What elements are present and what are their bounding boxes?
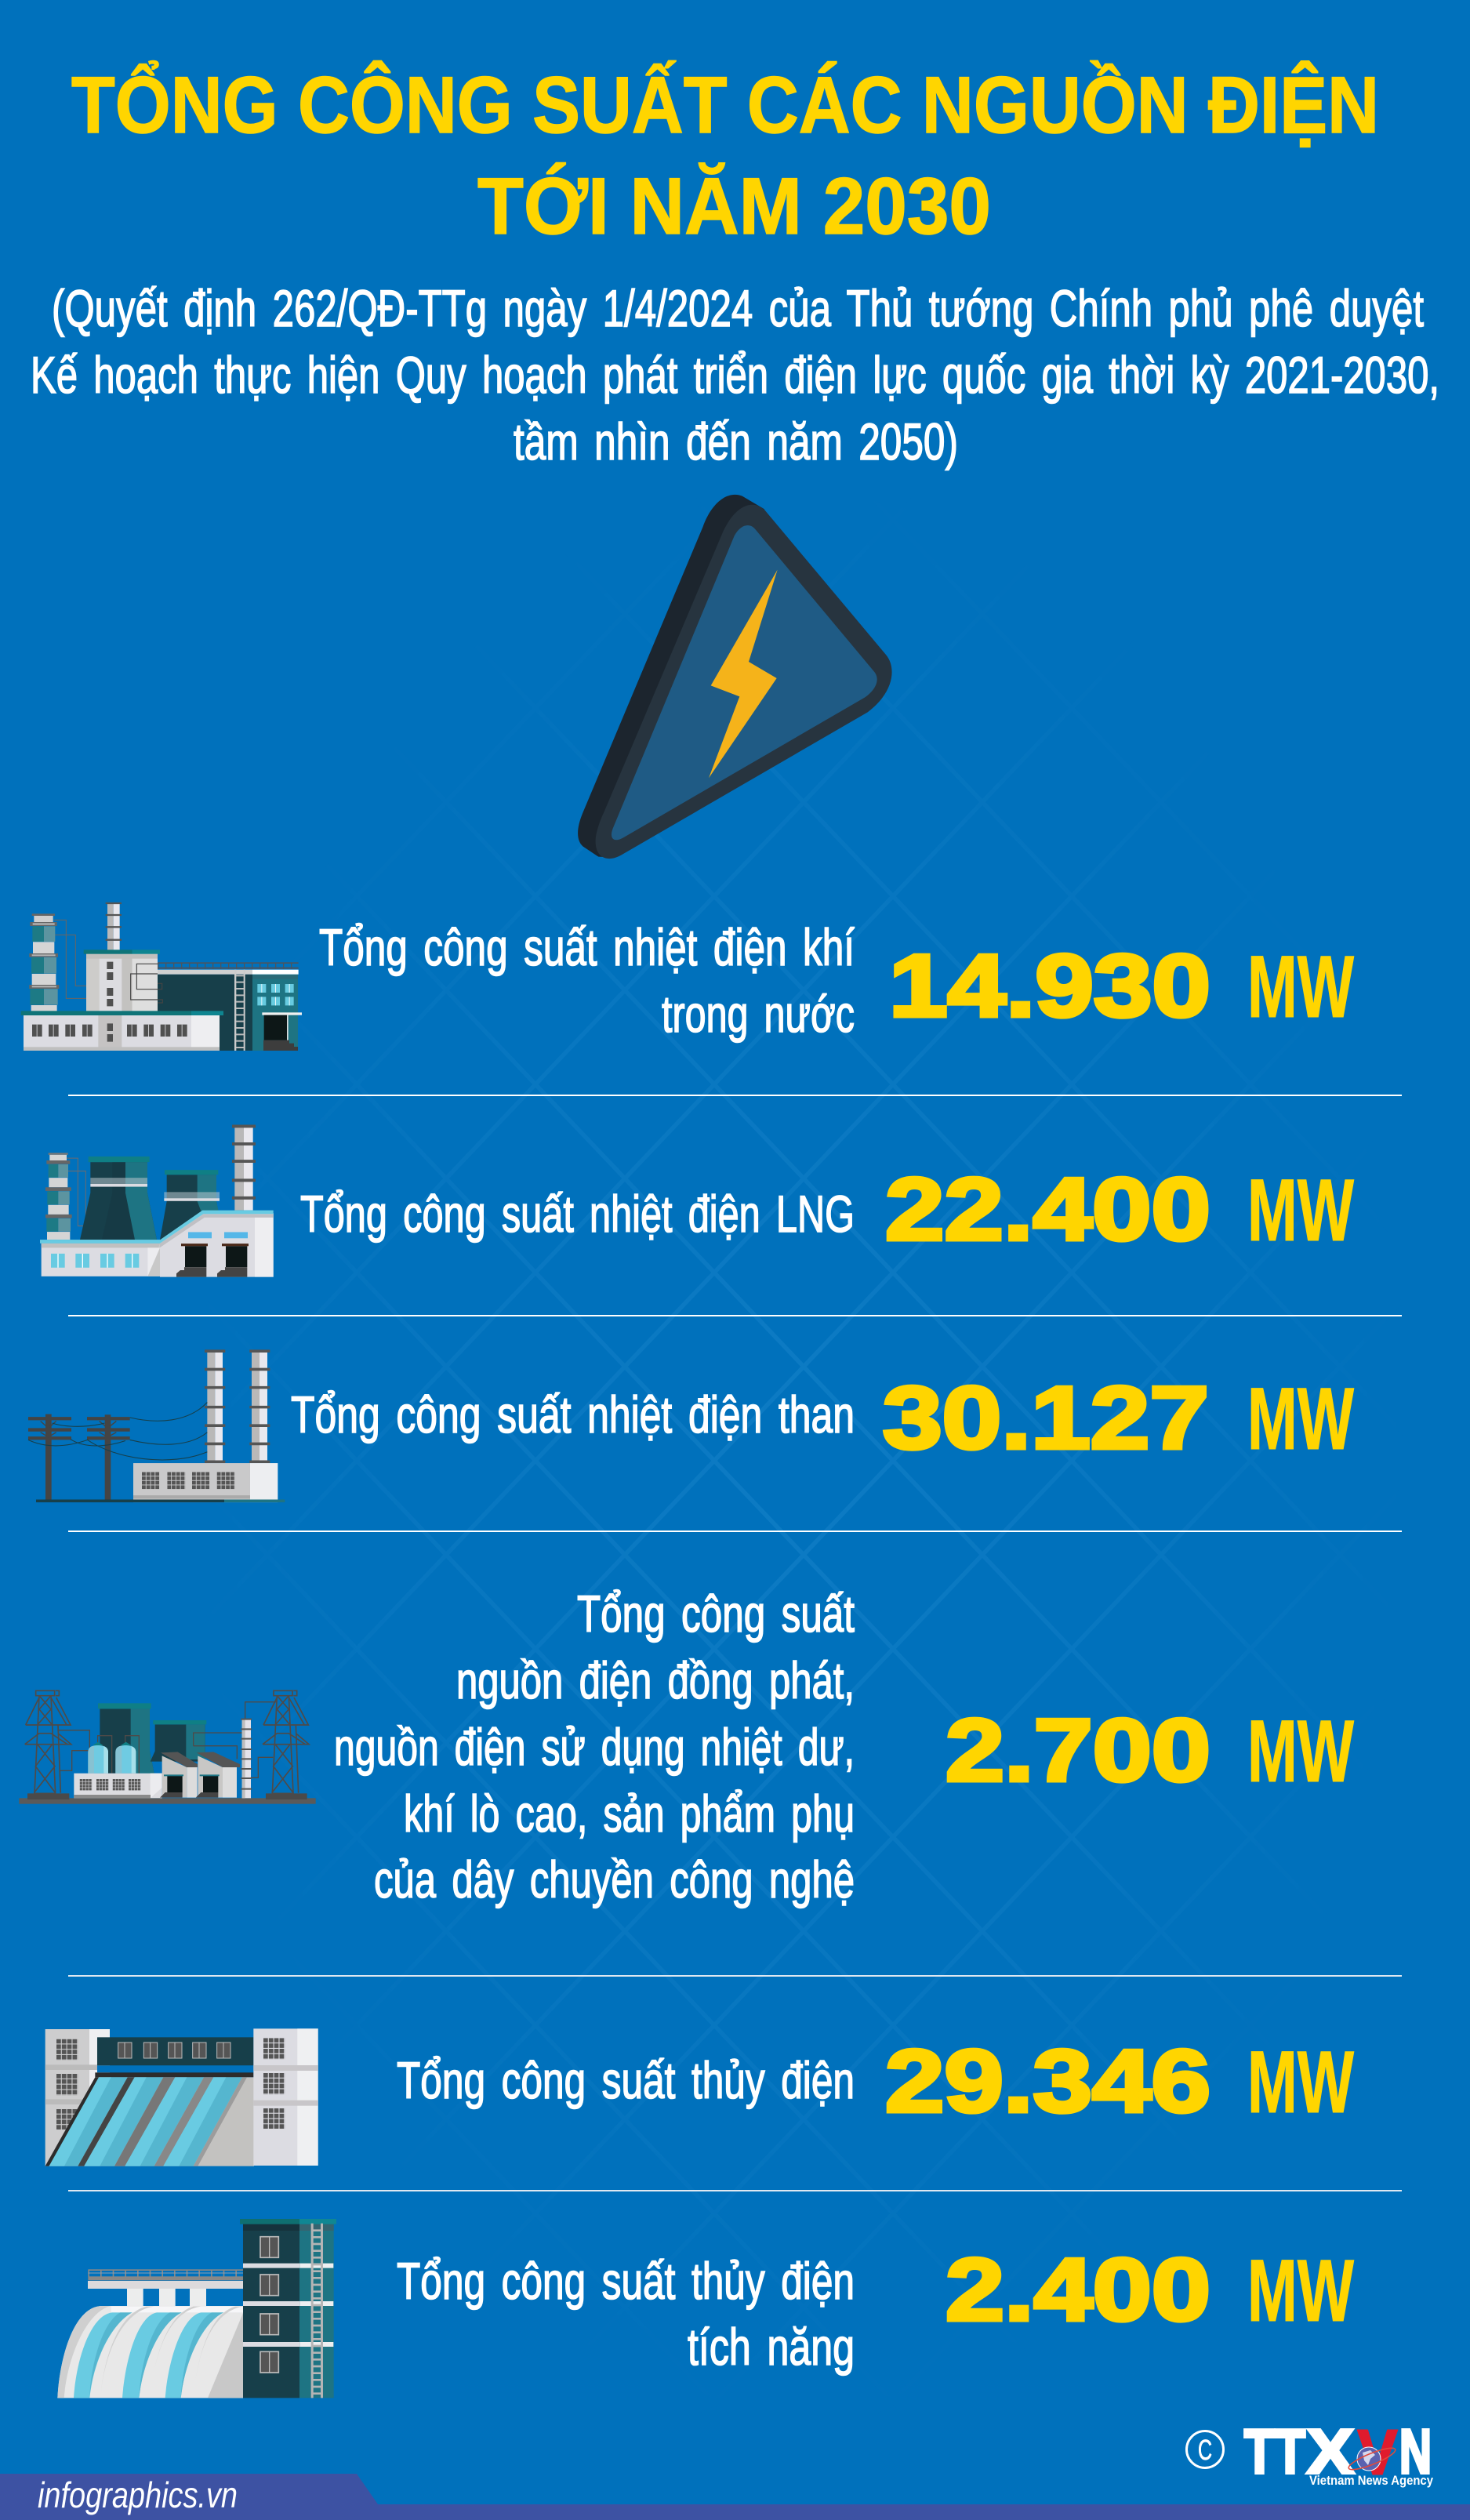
subtitle: tầm nhìn đến năm 2050): [514, 412, 958, 470]
row 1: domestic gas thermal: Tổng công suất nhiệt điện khí: [319, 918, 855, 976]
row 1: domestic gas thermal: trong nước: [662, 985, 855, 1043]
footer source text: infographics.vn: [38, 2475, 238, 2515]
logo: TTXVN: X: [1307, 2417, 1354, 2486]
row 1: domestic gas thermal: [319, 918, 1354, 1043]
row 6: pumped-storage hydropower: [397, 2240, 1354, 2376]
title: TỚI NĂM 2030: [477, 162, 991, 251]
row 2: LNG thermal: MW: [1247, 1161, 1354, 1259]
row 3: coal thermal: MW: [1247, 1370, 1354, 1468]
logo: TTXVN: C: [1198, 2434, 1212, 2466]
dividers: [68, 1095, 1402, 2191]
subtitle: [31, 279, 1439, 470]
row 2: LNG thermal: [300, 1160, 1354, 1259]
row 2: LNG thermal: Tổng công suất nhiệt điện LNG: [300, 1185, 855, 1243]
icon: gas power plant: [21, 903, 302, 1051]
row 3: coal thermal: Tổng công suất nhiệt điện than: [291, 1385, 855, 1443]
row 6: pumped-storage hydropower: MW: [1247, 2242, 1354, 2340]
row 2: LNG thermal: 22.400: [885, 1160, 1210, 1258]
logo: TTXVN: Vietnam News Agency: [1309, 2473, 1433, 2488]
row 5: hydropower: Tổng công suất thủy điện: [397, 2051, 855, 2109]
row 1: domestic gas thermal: 14.930: [889, 936, 1210, 1035]
row 6: pumped-storage hydropower: Tổng công suất thủy điện: [397, 2252, 855, 2310]
footer band: [0, 2474, 1470, 2520]
icon: lightning warning triangle: [578, 495, 892, 859]
row 1: domestic gas thermal: MW: [1247, 938, 1354, 1036]
icon: pumped-storage hydro: [57, 2219, 336, 2398]
row 4: cogeneration: 2.700: [946, 1701, 1210, 1799]
icon: LNG power plant: [40, 1125, 274, 1277]
icon: coal power plant: [28, 1350, 285, 1502]
row 4: cogeneration: nguồn điện đồng phát,: [456, 1651, 855, 1709]
icon: hydroelectric dam: [45, 2028, 318, 2166]
row 6: pumped-storage hydropower: tích năng: [688, 2318, 855, 2376]
row 5: hydropower: MW: [1247, 2033, 1354, 2131]
logo: TTXVN: V: [1358, 2417, 1397, 2487]
row 3: coal thermal: 30.127: [883, 1368, 1209, 1467]
title: [71, 60, 1379, 251]
row 5: hydropower: [397, 2032, 1354, 2131]
row 5: hydropower: 29.346: [885, 2032, 1210, 2130]
row 3: coal thermal: [291, 1368, 1354, 1468]
row 4: cogeneration: khí lò cao, sản phẩm phụ: [404, 1785, 855, 1843]
logo: TTXVN: TT: [1244, 2417, 1305, 2486]
row 4: cogeneration: MW: [1247, 1702, 1354, 1800]
row 6: pumped-storage hydropower: 2.400: [946, 2240, 1210, 2339]
row 4: cogeneration: [334, 1585, 1354, 1908]
icon: cogeneration plant: [19, 1690, 316, 1804]
row 4: cogeneration: Tổng công suất: [577, 1585, 855, 1643]
row 4: cogeneration: nguồn điện sử dụng nhiệt dư,: [334, 1718, 855, 1776]
logo: TTXVN: N: [1399, 2417, 1432, 2486]
row 4: cogeneration: của dây chuyền công nghệ: [374, 1850, 855, 1908]
logo: TTXVN: [1187, 2417, 1433, 2488]
